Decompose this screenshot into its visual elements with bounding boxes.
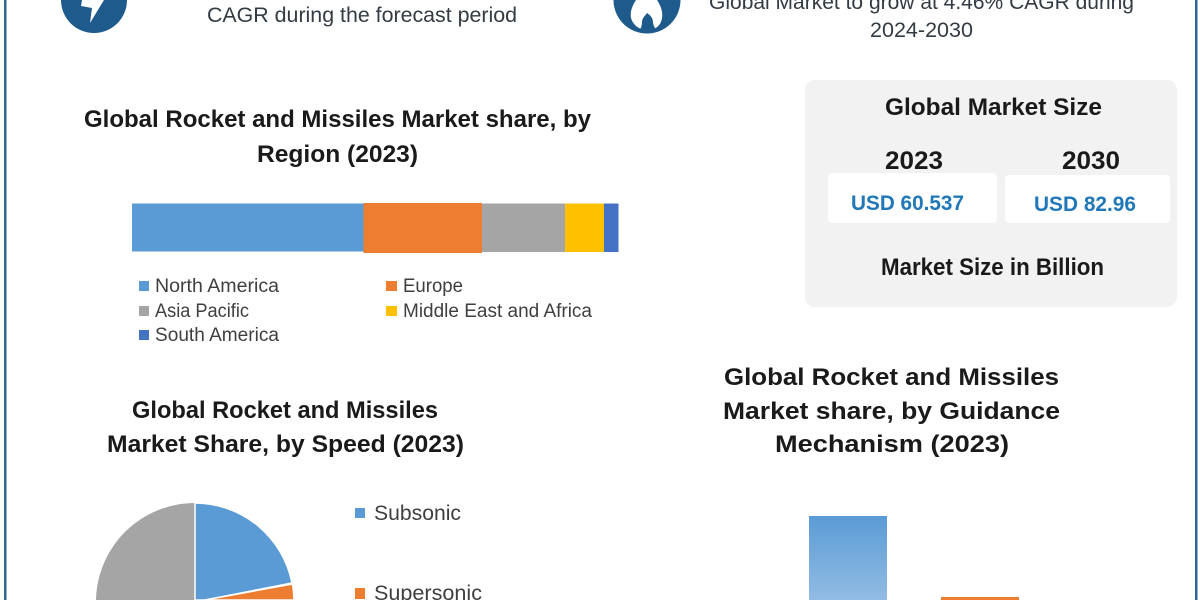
legend: speed: Subsonic [374, 502, 461, 525]
heading: share by guidance mechanism [723, 364, 1060, 458]
legend: regions: Europe [403, 276, 463, 297]
legend: regions: Asia Pacific [155, 301, 249, 322]
heading: share by region: Global Rocket and Missiles Market share, by [84, 106, 592, 133]
panel heading: Global Market Size [885, 94, 1102, 121]
legend: regions [139, 276, 592, 346]
pie chart: speed share [96, 503, 294, 600]
text: market growth note [709, 0, 1134, 42]
panel footer: Market Size in Billion [881, 254, 1104, 281]
heading: share by guidance mechanism: Mechanism (2023) [775, 431, 1009, 458]
panel: global market size [805, 80, 1177, 307]
value box 2030 [1005, 175, 1170, 223]
heading: share by speed [107, 397, 464, 458]
value box 2023: USD 60.537 [851, 192, 964, 215]
heading: share by guidance mechanism: Market share, by Guidance [723, 398, 1060, 425]
legend: speed [355, 502, 482, 600]
bar chart: guidance mechanism [809, 516, 1019, 600]
year 2030: 2030 [1062, 147, 1120, 175]
icon: flame [614, 0, 680, 34]
year 2023: 2023 [885, 147, 943, 175]
legend: regions: South America [155, 325, 279, 346]
value box 2023 [828, 173, 997, 223]
legend: regions: Middle East and Africa [403, 301, 592, 322]
text: CAGR forecast note: CAGR during the forecast period [207, 4, 517, 27]
legend: regions: North America [155, 276, 279, 297]
heading: share by speed: Global Rocket and Missiles [132, 397, 438, 424]
icon: lightning bolt [61, 0, 127, 33]
value box 2030: USD 82.96 [1034, 193, 1136, 216]
heading: share by region: Region (2023) [257, 141, 418, 168]
stacked bar chart: region share [132, 203, 618, 253]
heading: share by speed: Market Share, by Speed (2023) [107, 431, 464, 458]
text: market growth note: 2024-2030 [870, 19, 973, 42]
heading: share by guidance mechanism: Global Rocket and Missiles [724, 364, 1059, 391]
heading: share by region [84, 106, 592, 168]
